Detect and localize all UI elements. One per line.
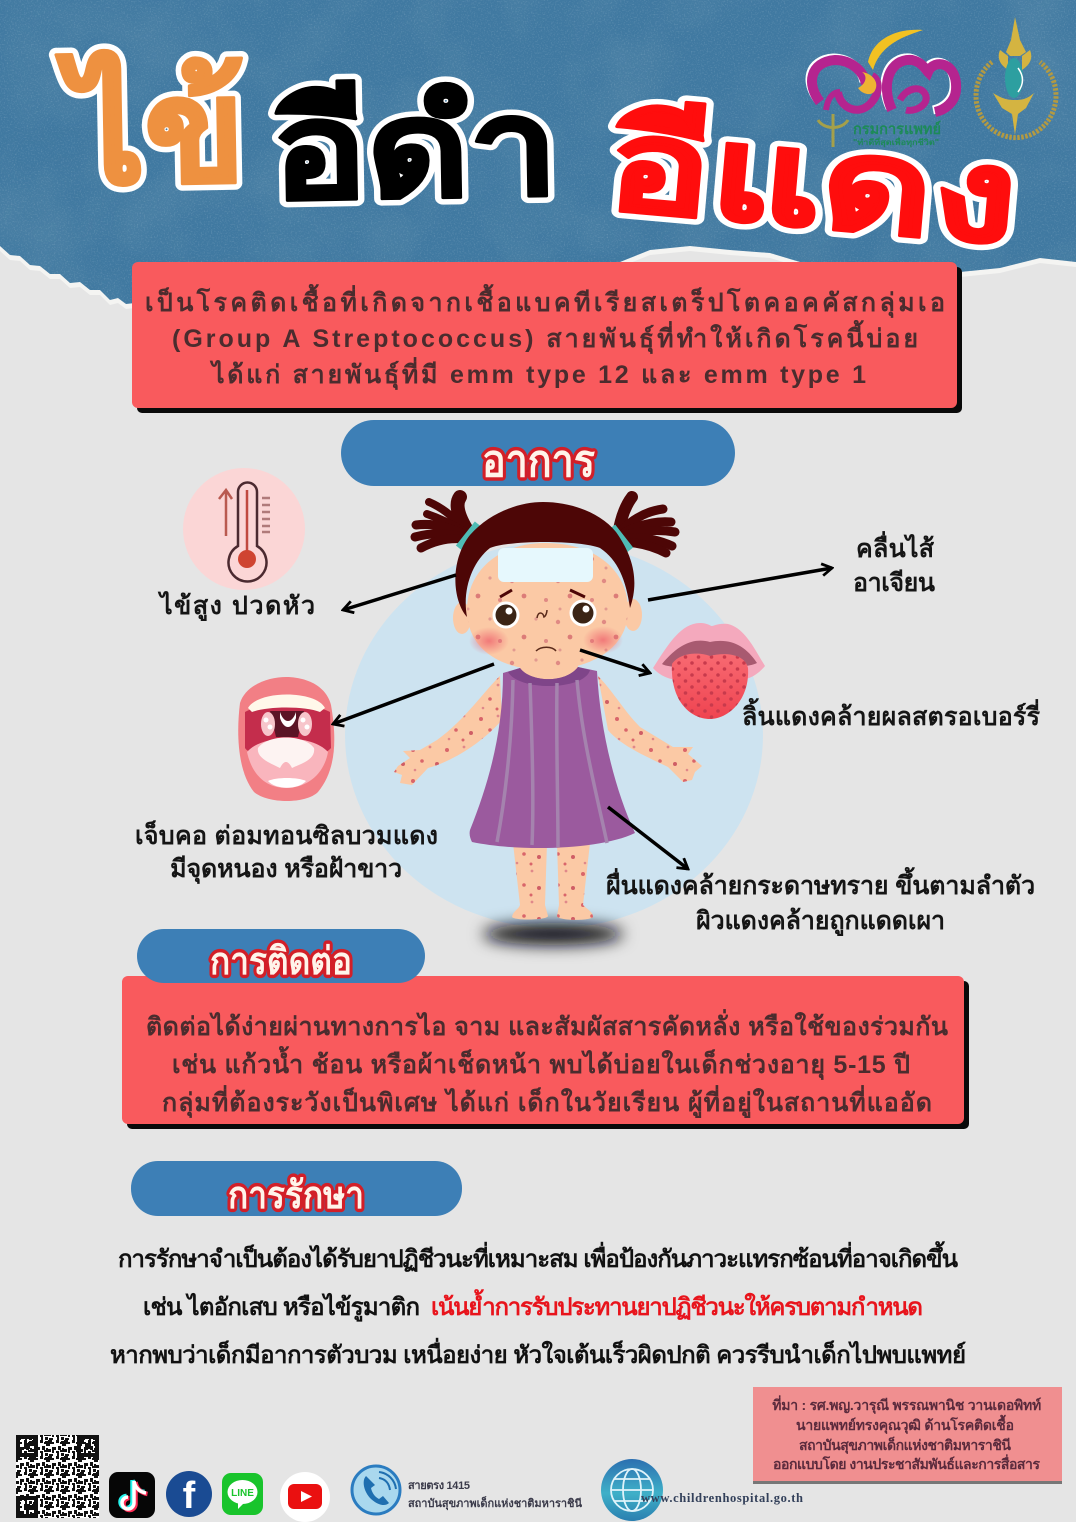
icon: YouTube: [280, 1472, 330, 1522]
panel: disease description: ได้แก่ สายพันธุ์ที่มี emm type 12 และ emm type 1: [209, 357, 866, 391]
logo: department of medical services: [810, 30, 956, 148]
icon: sore throat mouth: [238, 677, 334, 801]
label: nausea vomiting: [853, 531, 935, 597]
logo: institute emblem: [976, 17, 1056, 138]
label: nausea vomiting: อาเจียน: [853, 569, 935, 597]
label: strawberry tongue: ลิ้นแดงคล้ายผลสตรอเบอร์รี่: [742, 697, 1041, 731]
label: sore throat: เจ็บคอ ต่อมทอนซิลบวมแดง: [135, 820, 438, 850]
title: ไข้: ไข้: [56, 47, 247, 216]
treatment text block: เช่น ไตอักเสบ หรือไข้รูมาติก: [143, 1292, 420, 1322]
panel: transmission text: [122, 976, 969, 1129]
hair: [455, 502, 634, 617]
icon: hotline phone: [352, 1466, 400, 1514]
dress: [470, 667, 635, 848]
title: อีดำ: อีดำ: [271, 75, 559, 228]
neck: [520, 660, 578, 682]
ground shadow: [483, 923, 623, 945]
title: อีดำ: อีดำ: [271, 75, 559, 228]
heading pill: symptoms: [341, 420, 735, 486]
source credit box: [753, 1387, 1062, 1484]
QR code: [16, 1435, 99, 1518]
title: อีแดง: อีแดง: [602, 93, 1023, 272]
panel: disease description: เป็นโรคติดเชื้อที่เกิดจากเชื้อแบคทีเรียสเตร็ปโตคอคคัสกลุ่มเอ: [145, 283, 945, 319]
hair ties: [459, 524, 630, 550]
hotline text: สายตรง 1415: [408, 1480, 470, 1492]
torn blue header: [0, 0, 1076, 310]
heading pill: treatment: การรักษา: [228, 1175, 364, 1217]
heading pill: treatment: [131, 1161, 462, 1217]
arms: [394, 676, 702, 785]
website url: www.childrenhospital.go.th: [641, 1491, 803, 1505]
icon: LINE: LINE: [231, 1488, 254, 1499]
source credit box: นายแพทย์ทรงคุณวุฒิ ด้านโรคติดเชื้อ: [796, 1414, 1014, 1434]
eyes: [492, 590, 596, 628]
hotline text: [408, 1480, 582, 1511]
hair pigtails: [415, 497, 675, 553]
panel: transmission text: กลุ่มที่ต้องระวังเป็นพิเศษ ได้แก่ เด็กในวัยเรียน ผู้ที่อยู่ในสถานที่แออัด: [162, 1085, 932, 1119]
arrows: [333, 568, 832, 869]
treatment text block: [110, 1240, 966, 1369]
icon: globe: [601, 1459, 663, 1521]
panel: transmission text: เช่น แก้วน้ำ ช้อน หรือผ้าเช็ดหน้า พบได้บ่อยในเด็กช่วงอายุ 5-15 ปี: [172, 1045, 910, 1081]
label: sore throat: [135, 820, 438, 885]
legs: [512, 843, 593, 920]
icon: Facebook: f: [183, 1475, 196, 1517]
nose and mouth: [536, 610, 556, 651]
icon: thermometer: [183, 468, 305, 590]
logo: department of medical services: "ทำดีที่สุดเพื่อทุกชีวิต": [853, 136, 939, 148]
fever patch: [498, 548, 593, 582]
title: ไข้: ไข้: [56, 47, 247, 216]
heading pill: transmission: [137, 929, 425, 983]
face: [467, 543, 628, 670]
treatment text block: หากพบว่าเด็กมีอาการตัวบวม เหนื่อยง่าย หัวใจเต้นเร็วผิดปกติ ควรรีบนำเด็กไปพบแพทย์: [110, 1337, 966, 1369]
treatment text block: การรักษาจำเป็นต้องได้รับยาปฏิชีวนะที่เหมาะสม เพื่อป้องกันภาวะแทรกซ้อนที่อาจเกิดขึ้น: [118, 1240, 959, 1273]
label: rash: ผื่นแดงคล้ายกระดาษทราย ขึ้นตามลำตัว: [606, 866, 1035, 900]
label: rash: ผิวแดงคล้ายถูกแดดเผา: [696, 907, 945, 937]
label: rash: [606, 866, 1035, 937]
source credit box: สถาบันสุขภาพเด็กแห่งชาติมหาราชินี: [799, 1436, 1011, 1454]
hotline text: สถาบันสุขภาพเด็กแห่งชาติมหาราชินี: [408, 1496, 582, 1511]
icon: Facebook: [166, 1471, 212, 1517]
logo: department of medical services: กรมการแพทย์: [853, 120, 941, 138]
label: sore throat: มีจุดหนอง หรือฝ้าขาว: [170, 855, 402, 885]
panel: transmission text: ติดต่อได้ง่ายผ่านทางการไอ จาม และสัมผัสสารคัดหลั่ง หรือใช้ของร่วมกัน: [146, 1009, 948, 1041]
ears: [453, 599, 642, 634]
heading pill: symptoms: อาการ: [482, 437, 595, 486]
heading pill: transmission: การติดต่อ: [210, 941, 352, 983]
source credit box: ที่มา : รศ.พญ.วารุณี พรรณพานิช วานเดอพิทท์: [772, 1395, 1041, 1414]
label: fever headache: ไข้สูง ปวดหัว: [157, 590, 315, 622]
title: อีแดง: อีแดง: [602, 93, 1023, 272]
icon: TikTok: [109, 1472, 155, 1518]
panel: disease description: [132, 262, 962, 413]
treatment text block: เน้นย้ำการรับประทานยาปฏิชีวนะให้ครบตามกำหนด: [431, 1288, 923, 1321]
cheeks: [469, 627, 509, 655]
label: nausea vomiting: คลื่นไส้: [856, 531, 935, 563]
icon: LINE: [222, 1473, 263, 1515]
background circle: [345, 542, 763, 928]
source credit box: ออกแบบโดย งานประชาสัมพันธ์และการสื่อสาร: [773, 1454, 1040, 1472]
icon: strawberry tongue: [653, 623, 765, 719]
panel: disease description: (Group A Streptococcus) สายพันธุ์ที่ทำให้เกิดโรคนี้บ่อย: [172, 319, 918, 355]
child illustration: [345, 497, 763, 945]
